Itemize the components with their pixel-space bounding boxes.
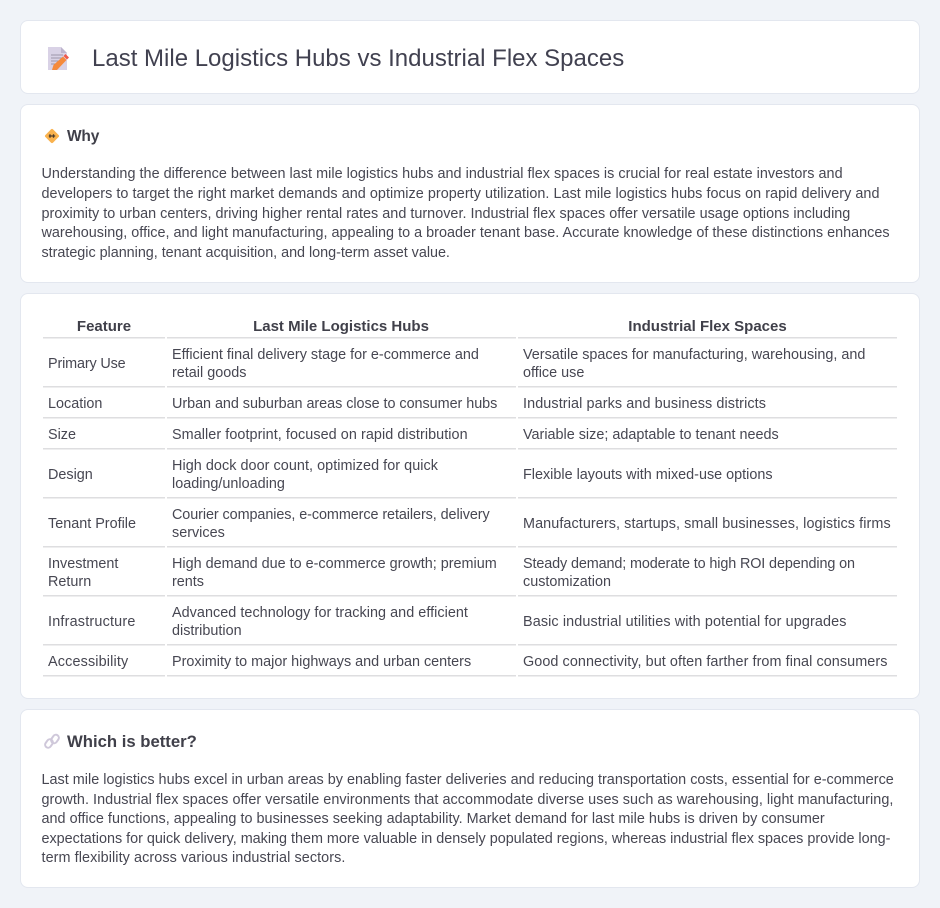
text: rents xyxy=(172,574,204,590)
text: Good connectivity, but often farther from final consumers xyxy=(523,654,887,670)
text: developers to target the right market demands and optimize property utilization. Last mile logistics hubs focus on rapid delivery and xyxy=(42,186,880,202)
table header: last mile logistics hubs: Last Mile Logistics Hubs xyxy=(253,318,429,335)
text: Tenant Profile xyxy=(48,516,136,532)
text: Courier companies, e-commerce retailers, delivery xyxy=(172,507,490,523)
panel: which is better card xyxy=(20,709,920,888)
icon: warning diamond xyxy=(44,128,60,144)
title: Last Mile Logistics Hubs vs Industrial Flex Spaces xyxy=(92,45,624,72)
text: Design xyxy=(48,467,93,483)
text: retail goods xyxy=(172,365,246,381)
text: services xyxy=(172,525,225,541)
text: warehousing, office, and light manufacturing, appealing to a broader tenant base. Accurate knowledge of these distinctions enhances xyxy=(42,225,890,241)
text: High demand due to e-commerce growth; premium xyxy=(172,556,497,572)
text: term flexibility across various industrial sectors. xyxy=(42,850,345,866)
table header: feature: Feature xyxy=(77,318,131,335)
text: Size xyxy=(48,427,76,443)
text: distribution xyxy=(172,623,242,639)
text: Location xyxy=(48,396,102,412)
text block: which is better paragraph xyxy=(42,772,894,866)
heading: which is better: Which is better? xyxy=(67,732,197,751)
text: customization xyxy=(523,574,611,590)
text: Proximity to major highways and urban centers xyxy=(172,654,471,670)
text: Industrial parks and business districts xyxy=(523,396,766,412)
text: Infrastructure xyxy=(48,614,136,630)
heading: why: Why xyxy=(67,128,99,145)
text: proximity to urban centers, driving higher rental rates and turnover. Industrial flex spaces offer versatile usage options including xyxy=(42,206,850,222)
text: office use xyxy=(523,365,584,381)
text: Versatile spaces for manufacturing, warehousing, and xyxy=(523,347,865,363)
text: loading/unloading xyxy=(172,476,285,492)
text: Primary Use xyxy=(48,356,126,372)
icon: document with pencil xyxy=(48,47,69,70)
icon: chain link xyxy=(44,734,60,749)
text: Smaller footprint, focused on rapid distribution xyxy=(172,427,468,443)
text: Variable size; adaptable to tenant needs xyxy=(523,427,779,443)
text: Basic industrial utilities with potential for upgrades xyxy=(523,614,846,630)
text: Steady demand; moderate to high ROI depending on xyxy=(523,556,855,572)
text: Urban and suburban areas close to consumer hubs xyxy=(172,396,497,412)
text: and office functions, appealing to businesses seeking adaptability. Market demand for last mile hubs is driven by consumer xyxy=(42,811,825,827)
text: Investment xyxy=(48,556,118,572)
text block: why paragraph xyxy=(42,166,890,261)
panel: title card xyxy=(20,20,920,94)
text: Understanding the difference between last mile logistics hubs and industrial flex spaces is crucial for real estate investors and xyxy=(42,166,843,182)
panel: why card xyxy=(20,104,920,283)
text: Efficient final delivery stage for e-commerce and xyxy=(172,347,479,363)
comparison table xyxy=(43,318,897,677)
text: strategic planning, tenant acquisition, and long-term asset value. xyxy=(42,245,450,261)
text: Manufacturers, startups, small businesses, logistics firms xyxy=(523,516,891,532)
text: growth. Industrial flex spaces offer versatile environments that accommodate diverse uses such as warehousing, light manufacturing, xyxy=(42,792,893,808)
table header: industrial flex spaces: Industrial Flex Spaces xyxy=(628,318,787,335)
text: Return xyxy=(48,574,91,590)
text: Flexible layouts with mixed-use options xyxy=(523,467,773,483)
text: High dock door count, optimized for quick xyxy=(172,458,438,474)
panel: comparison table card xyxy=(20,293,920,699)
text: Last mile logistics hubs excel in urban areas by enabling faster deliveries and reducing transportation costs, essential for e-commerce xyxy=(42,772,894,788)
text: expectations for quick delivery, making them more valuable in densely populated regions, whereas industrial flex spaces provide long- xyxy=(42,831,890,847)
text: Accessibility xyxy=(48,654,128,670)
text: Advanced technology for tracking and efficient xyxy=(172,605,468,621)
